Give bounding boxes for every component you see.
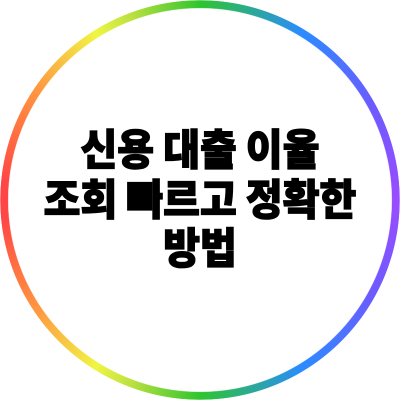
title: 신용 대출 이율	[80, 128, 320, 175]
title: 조회 빠르고 정확한	[44, 177, 356, 224]
title: 방법	[163, 226, 237, 273]
title	[44, 128, 356, 273]
